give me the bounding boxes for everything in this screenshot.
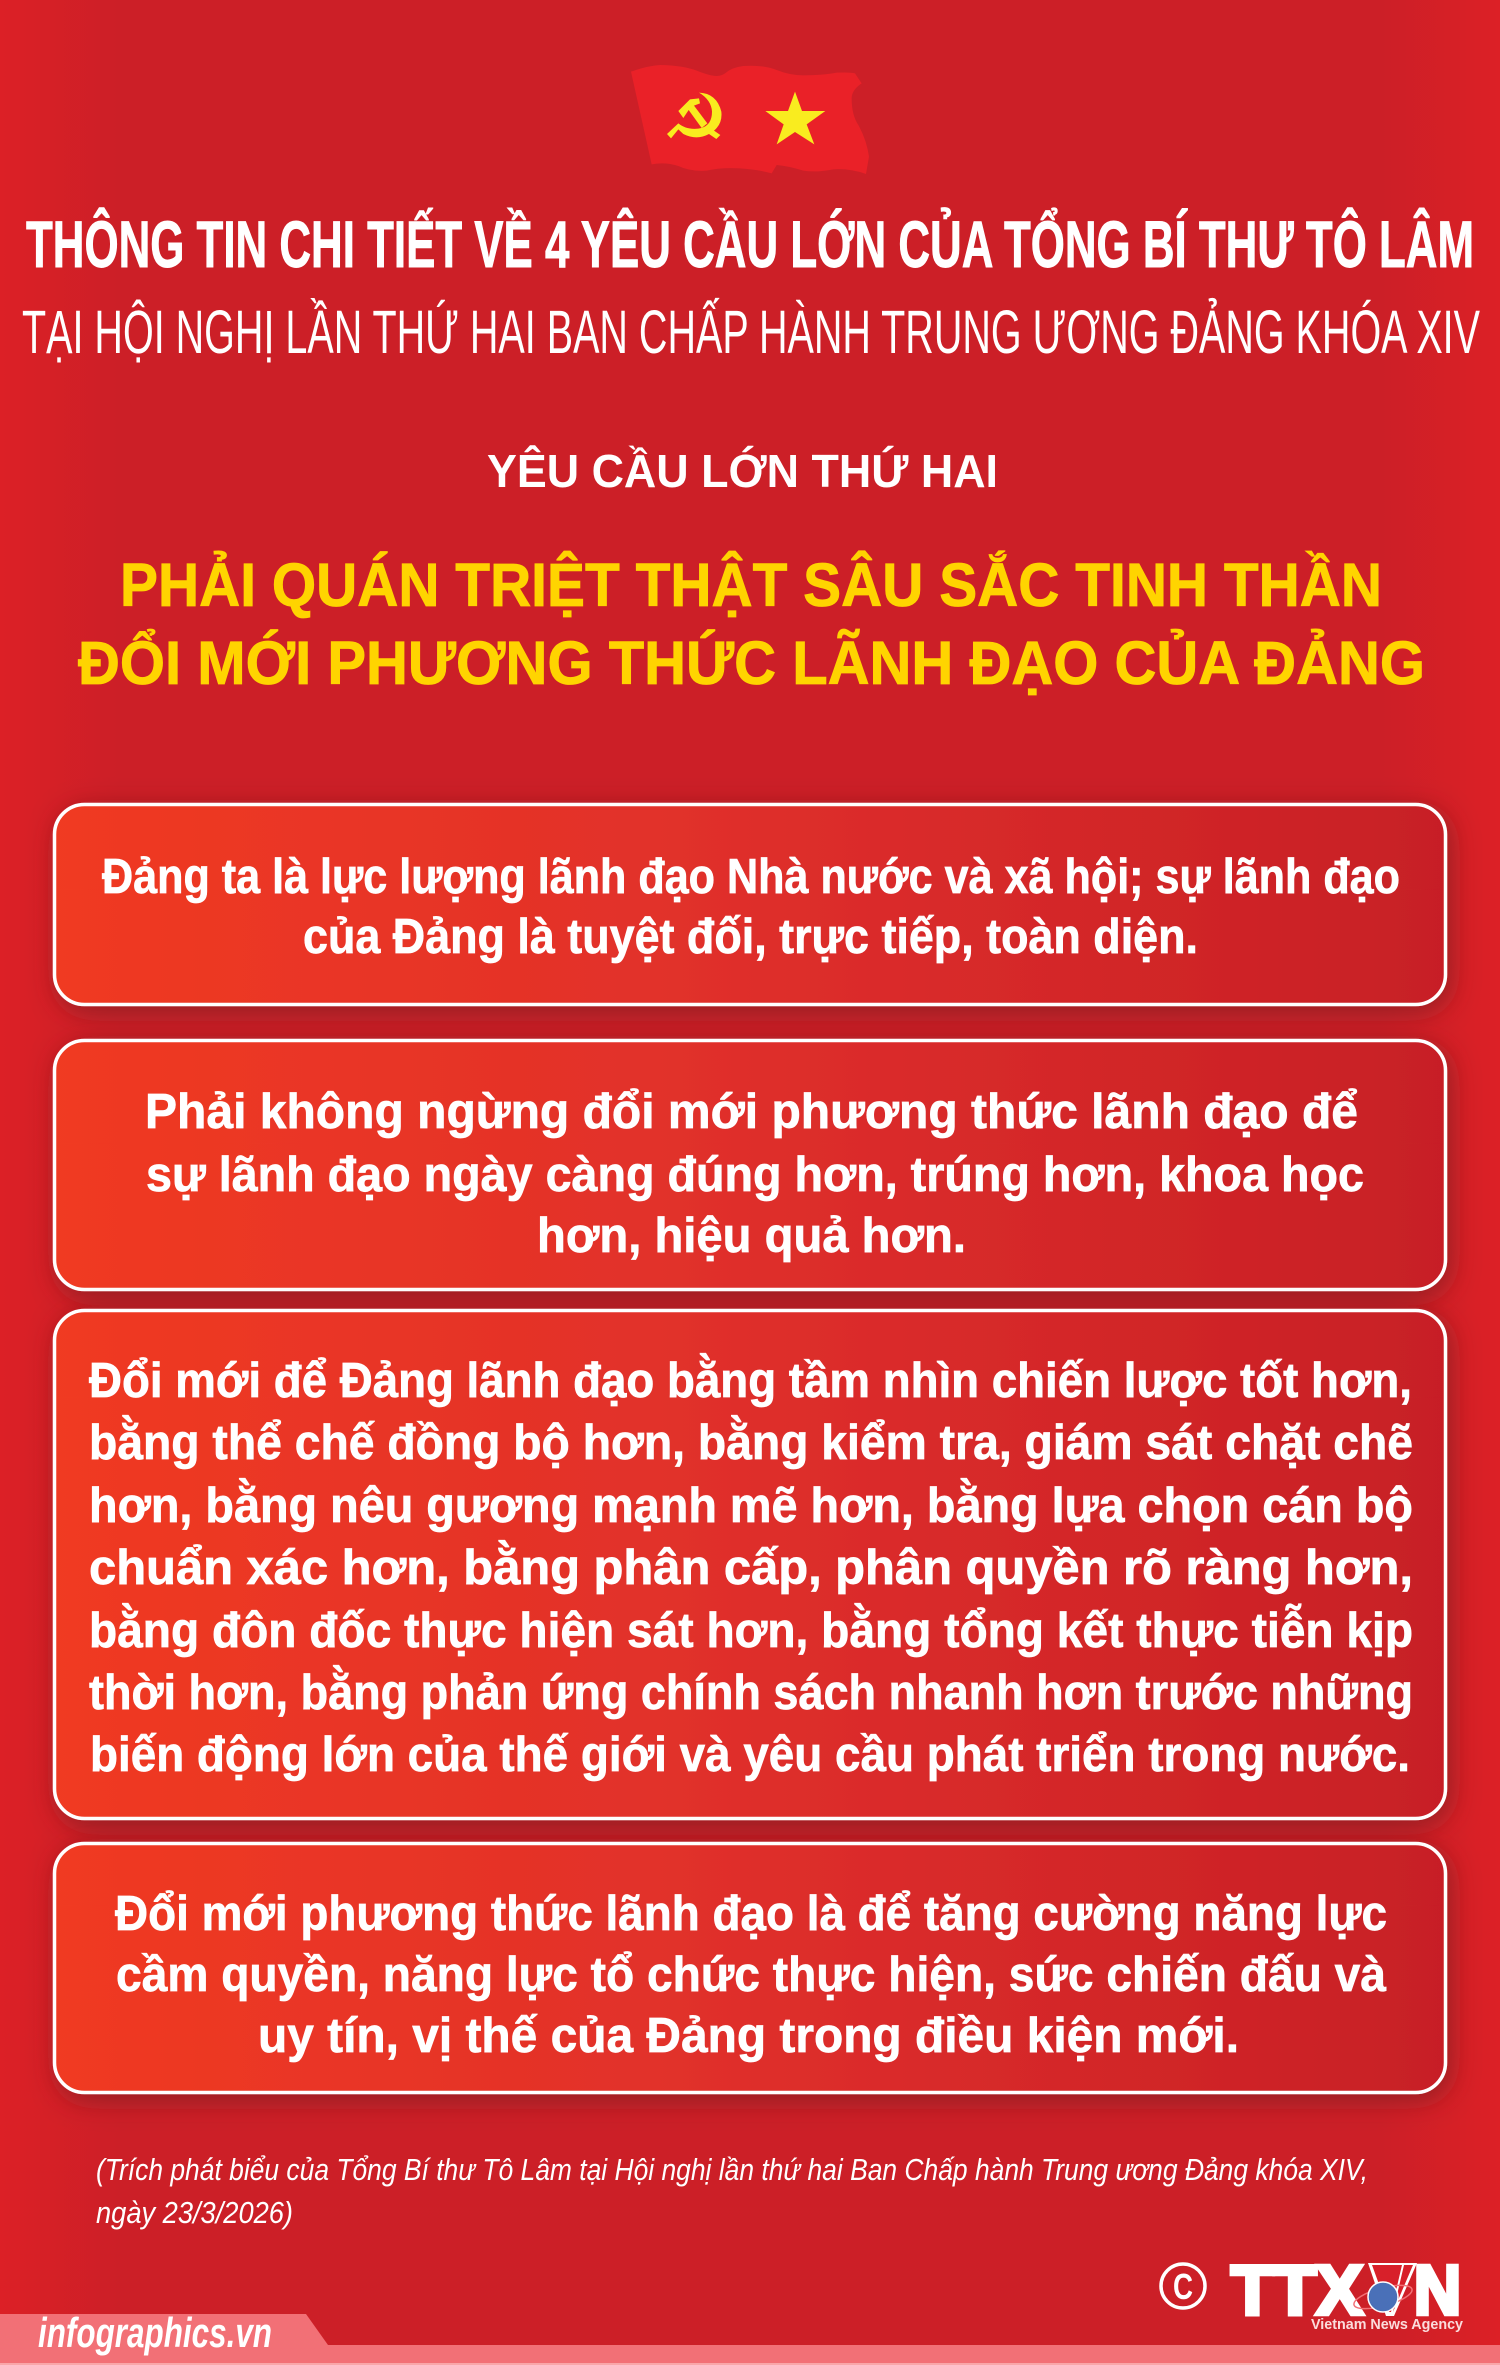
panel: box 3: hơn, bằng nêu gương mạnh mẽ hơn, bằng lựa chọn cán bộ [89,1478,1413,1533]
panel: box 3: chuẩn xác hơn, bằng phân cấp, phân quyền rõ ràng hơn, [89,1540,1413,1595]
footer bar with website tab [0,2309,1500,2365]
panel: box 4 [54,1844,1446,2092]
panel: box 4: uy tín, vị thế của Đảng trong điều kiện mới. [258,2009,1239,2063]
panel: box 3 [54,1310,1446,1818]
logo: TTXVN Vietnam News Agency: Vietnam News Agency [1311,2316,1464,2333]
panel: box 4: cầm quyền, năng lực tổ chức thực hiện, sức chiến đấu và [116,1948,1387,2002]
yellow heading: PHẢI QUÁN TRIỆT THẬT SÂU SẮC TINH THẦN [120,551,1382,619]
panel: box 1: của Đảng là tuyệt đối, trực tiếp, toàn diện. [303,910,1198,964]
panel: box 3: thời hơn, bằng phản ứng chính sách nhanh hơn trước những [89,1665,1413,1720]
panel: box 2: sự lãnh đạo ngày càng đúng hơn, trúng hơn, khoa học [146,1148,1364,1202]
subheading: YÊU CẦU LỚN THỨ HAI [487,445,998,497]
logo: TTXVN Vietnam News Agency: N [1414,2251,1461,2329]
yellow heading: ĐỔI MỚI PHƯƠNG THỨC LÃNH ĐẠO CỦA ĐẢNG [78,628,1425,697]
logo: TTXVN Vietnam News Agency [1161,2251,1464,2333]
logo: TTXVN Vietnam News Agency: TTX [1231,2251,1363,2329]
panel: box 2: Phải không ngừng đổi mới phương thức lãnh đạo để [145,1085,1358,1139]
source note [96,2152,1368,2230]
panel: box 2 [54,1040,1446,1290]
panel: box 4: Đổi mới phương thức lãnh đạo là để tăng cường năng lực [115,1887,1387,1941]
panel: box 3: Đổi mới để Đảng lãnh đạo bằng tầm nhìn chiến lược tốt hơn, [89,1353,1412,1408]
panel: box 3: biến động lớn của thế giới và yêu cầu phát triển trong nước. [90,1728,1410,1782]
source note: ngày 23/3/2026) [96,2195,293,2230]
yellow heading [78,551,1425,697]
icon: flag with hammer, sickle and star [631,65,869,174]
logo: TTXVN Vietnam News Agency: C [1173,2266,1193,2307]
title [22,207,1480,366]
panel: box 3: bằng đôn đốc thực hiện sát hơn, bằng tổng kết thực tiễn kịp [89,1603,1413,1658]
panel: box 1 [54,804,1446,1004]
panel: box 2: hơn, hiệu quả hơn. [537,1209,966,1263]
footer bar with website tab: infographics.vn [38,2309,272,2356]
panel: box 3: bằng thể chế đồng bộ hơn, bằng kiểm tra, giám sát chặt chẽ [89,1415,1413,1470]
